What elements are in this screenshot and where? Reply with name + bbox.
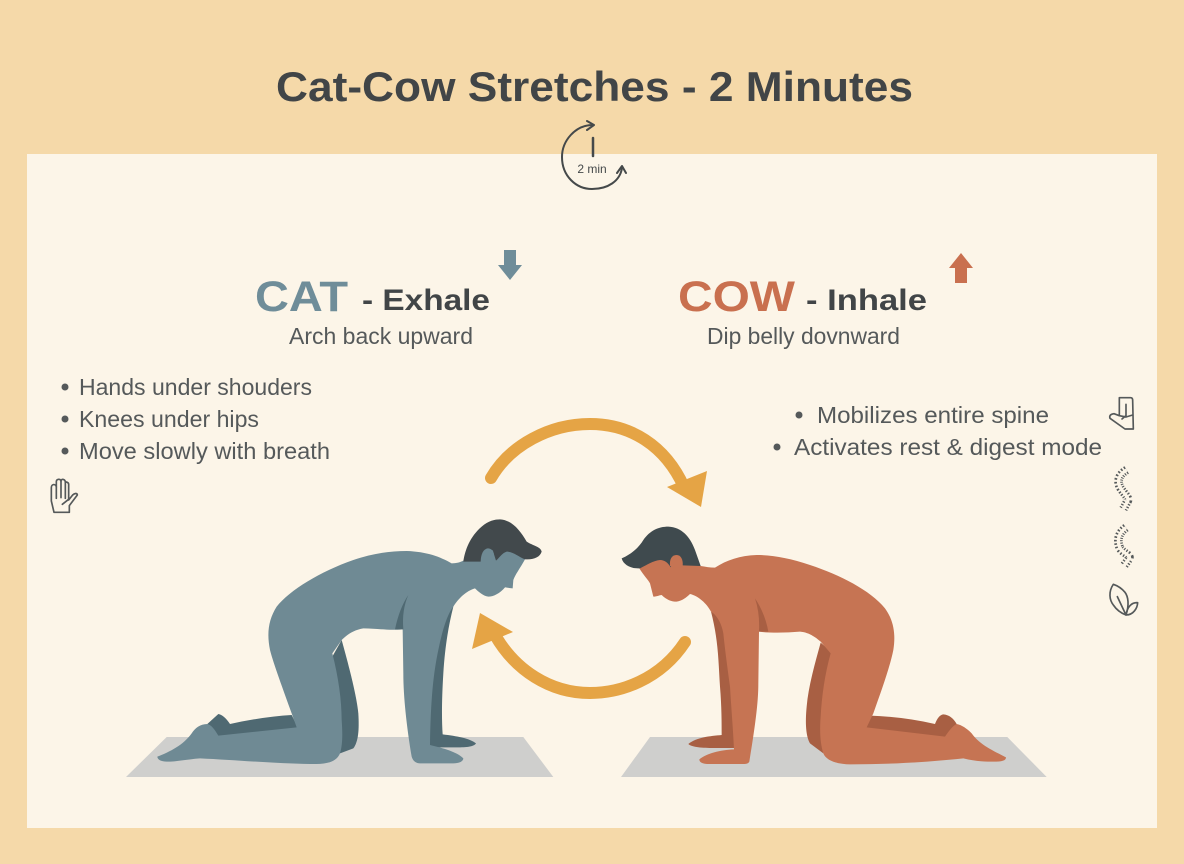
list: cat instructions: Knees under hips xyxy=(79,406,259,432)
arrow: cow to cat xyxy=(472,613,685,693)
icon: 2 minute timer: 2 min xyxy=(577,162,607,176)
heading: cow inhale: COW xyxy=(678,273,795,321)
text: cow subtitle: Dip belly dovnward xyxy=(707,323,900,349)
icon: spine xyxy=(1118,528,1129,567)
heading: cow inhale xyxy=(678,273,927,321)
text: cat subtitle: Arch back upward xyxy=(289,323,473,349)
list: cow benefits: Activates rest & digest mode xyxy=(794,434,1102,460)
panel: main content xyxy=(27,154,1157,828)
heading: cat exhale: - Exhale xyxy=(362,284,490,317)
yoga mat: cat xyxy=(126,737,553,777)
heading: cat exhale xyxy=(255,273,490,321)
list: cow benefits xyxy=(774,402,1102,460)
figure: cat pose xyxy=(126,519,553,777)
icon: down arrow xyxy=(498,250,522,280)
heading: cow inhale: - Inhale xyxy=(806,284,927,317)
list: cat instructions: Hands under shouders xyxy=(79,374,312,400)
icon: spine xyxy=(1119,470,1128,509)
heading: cat exhale: CAT xyxy=(255,273,348,321)
icon: leaves xyxy=(1110,584,1138,615)
arrow: cat to cow xyxy=(491,424,707,507)
person: cat pose xyxy=(157,519,542,764)
yoga mat: cow xyxy=(621,737,1047,777)
icon: open hand xyxy=(51,479,77,512)
list: cat instructions xyxy=(62,374,330,464)
title: Cat-Cow Stretches - 2 Minutes xyxy=(276,63,913,110)
icon: hand with card xyxy=(1110,398,1133,429)
icon: 2 minute timer xyxy=(562,121,626,189)
list: cat instructions: Move slowly with breath xyxy=(79,438,330,464)
figure: cow pose xyxy=(621,527,1047,777)
icon: up arrow xyxy=(949,253,973,283)
list: cow benefits: Mobilizes entire spine xyxy=(817,402,1049,428)
person: cow pose xyxy=(622,527,1006,764)
